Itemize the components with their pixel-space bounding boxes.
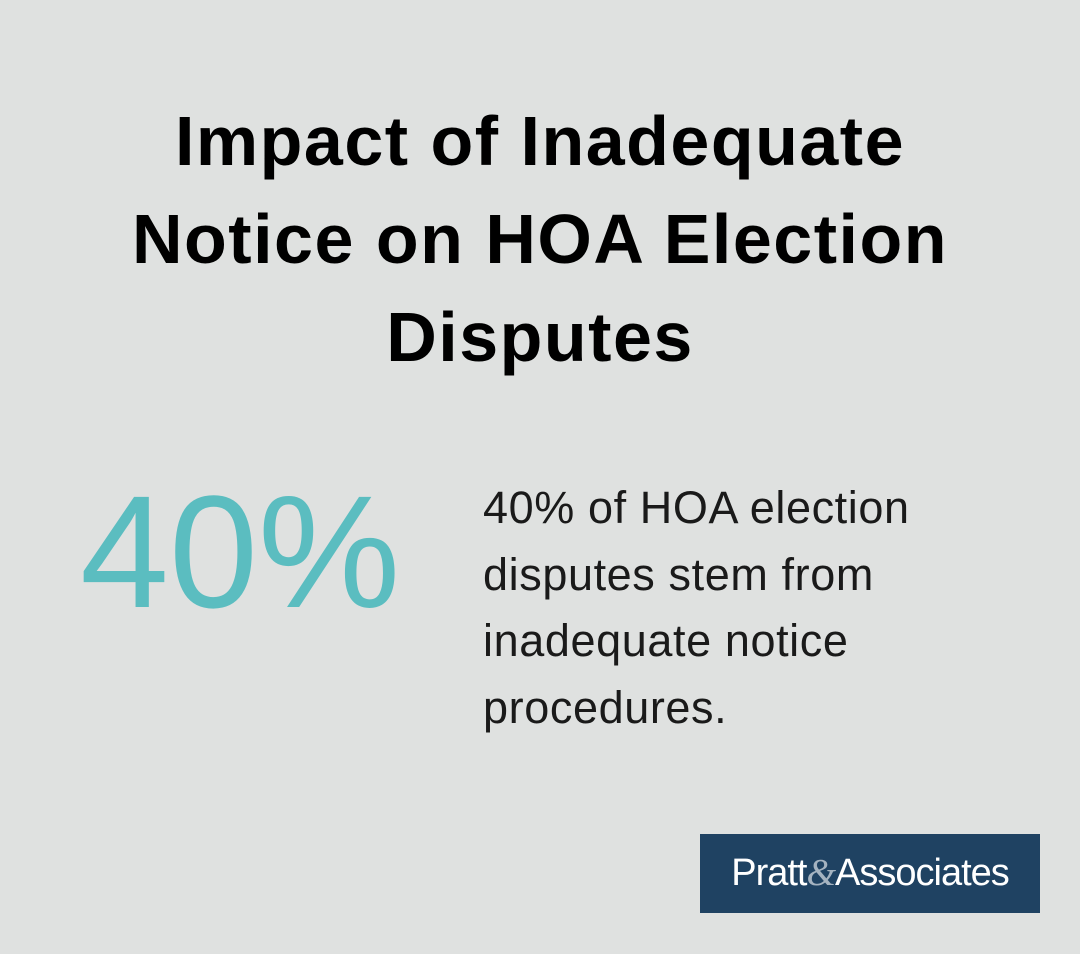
title: Notice on HOA Election: [132, 200, 948, 278]
logo: [700, 834, 1040, 913]
description text: [483, 482, 910, 732]
description text: procedures.: [483, 682, 727, 732]
description text: 40% of HOA election: [483, 482, 910, 533]
big statistic: 40%: [80, 462, 400, 641]
title: [132, 102, 948, 376]
logo: Pratt&Associates: [731, 852, 1009, 894]
title: Disputes: [386, 298, 694, 376]
description text: disputes stem from: [483, 548, 874, 600]
description text: inadequate notice: [483, 615, 848, 666]
title: Impact of Inadequate: [175, 102, 905, 180]
